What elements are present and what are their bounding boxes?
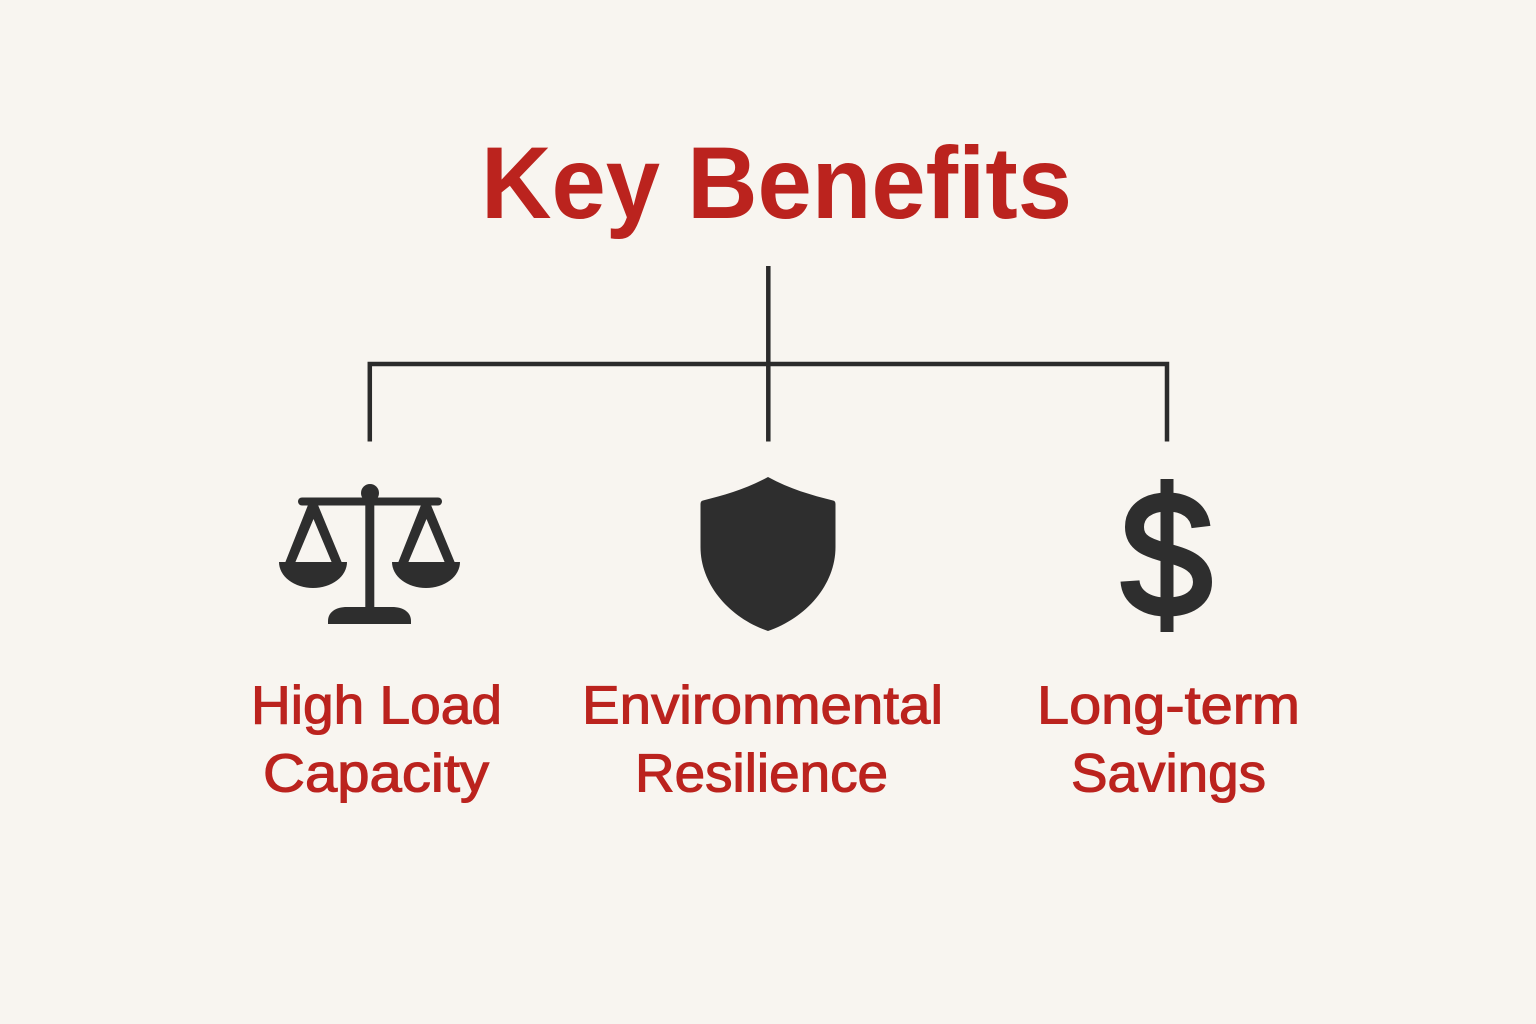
label: long-term savings (1037, 676, 1300, 804)
label: environmental resilience (582, 676, 943, 804)
icon: shield (700, 477, 836, 631)
label: high load capacity (251, 676, 502, 804)
label: high load capacity: High Load (251, 676, 502, 736)
label: long-term savings: Long-term (1037, 676, 1300, 736)
icon: balance scale (279, 484, 460, 624)
label: environmental resilience: Environmental (582, 676, 943, 736)
icon: dollar sign (1130, 479, 1202, 632)
label: long-term savings: Savings (1071, 744, 1266, 804)
title: Key Benefits (481, 126, 1072, 240)
label: high load capacity: Capacity (263, 744, 489, 804)
label: environmental resilience: Resilience (635, 744, 888, 804)
connector tree (370, 266, 1167, 442)
